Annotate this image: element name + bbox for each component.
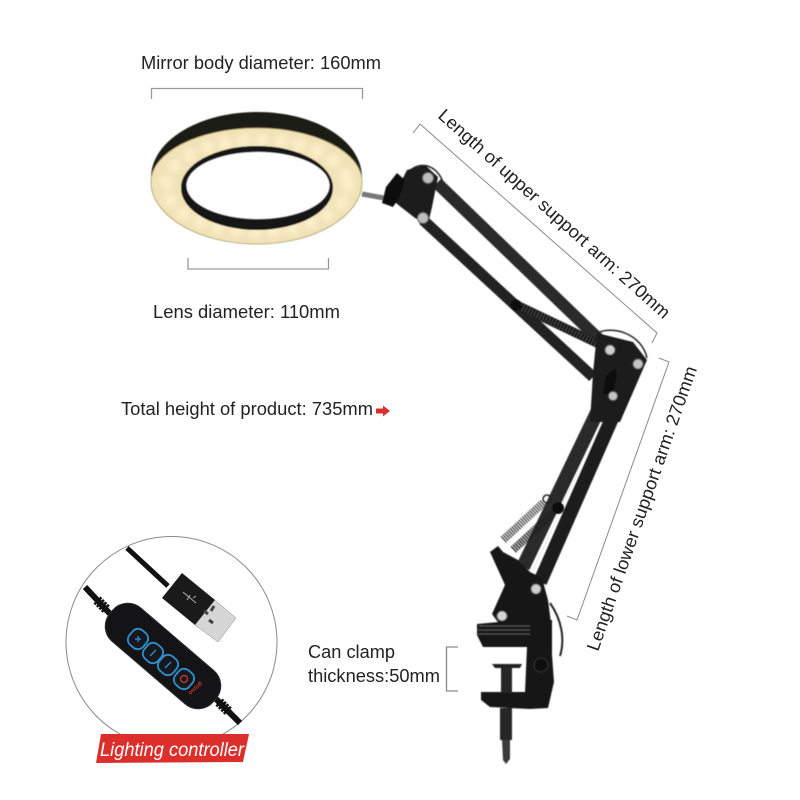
label: clamp thickness: Can clamp xyxy=(308,642,395,662)
lens xyxy=(186,152,330,219)
label: total height: Total height of product: 735mm xyxy=(121,399,373,419)
usb symbol xyxy=(183,592,196,603)
head bolts xyxy=(422,172,434,184)
label: lens diameter: Lens diameter: 110mm xyxy=(153,302,340,322)
power wire xyxy=(550,603,562,656)
lower arm bars xyxy=(540,400,620,582)
upper spring xyxy=(517,305,607,348)
clamp screw xyxy=(500,668,512,740)
controller body xyxy=(97,595,229,717)
spring pivot xyxy=(510,300,522,310)
magnifier ring lamp xyxy=(151,112,362,244)
on/off mark: on/off xyxy=(187,681,205,697)
head wire xyxy=(407,165,443,182)
label: clamp thickness xyxy=(308,642,440,686)
label: upper arm length: Length of upper support arm: 270mm xyxy=(434,105,674,323)
head plate xyxy=(392,165,438,224)
elbow plate xyxy=(590,333,647,422)
swivel joint xyxy=(362,194,384,198)
base plate xyxy=(490,546,551,625)
bracket: clamp thickness xyxy=(446,647,458,691)
dimension line: upper arm xyxy=(413,124,657,343)
clamp body xyxy=(477,620,554,709)
inner lens rim xyxy=(181,146,333,230)
banner background xyxy=(96,734,249,763)
head knob xyxy=(382,173,405,207)
heading: mirror body diameter: Mirror body diameter: 160mm xyxy=(141,53,381,73)
clamp knob xyxy=(534,658,548,672)
power glyph xyxy=(180,676,188,682)
base bolts xyxy=(531,584,541,594)
ring body xyxy=(151,112,362,186)
label: lower arm length: Length of lower support arm: 270mm xyxy=(583,364,701,653)
usb contacts xyxy=(204,606,214,623)
arrow: total height xyxy=(376,406,390,416)
bracket: mirror body diameter xyxy=(152,88,362,99)
inset circle xyxy=(66,536,277,748)
slit between lower bars xyxy=(533,473,578,570)
usb metal tip xyxy=(195,600,236,642)
dimension line: lower arm xyxy=(567,358,669,620)
ring light face xyxy=(151,128,362,244)
upper arm bars xyxy=(437,183,607,347)
usb plug housing xyxy=(162,573,215,625)
articulated arm xyxy=(362,165,647,625)
desk clamp xyxy=(477,603,562,764)
panel: lighting controller xyxy=(66,536,277,763)
control buttons xyxy=(125,626,197,692)
controller cables xyxy=(85,548,240,723)
elbow wire xyxy=(597,330,647,358)
label: clamp thickness: thickness:50mm xyxy=(308,666,440,686)
bracket: lens diameter xyxy=(188,258,328,269)
screw tip xyxy=(502,740,510,764)
clamp grip ridges xyxy=(478,626,530,634)
clamp screw pad xyxy=(492,664,522,668)
banner text: Lighting controller xyxy=(100,739,245,761)
lower springs xyxy=(503,503,543,540)
elbow knob xyxy=(603,368,617,395)
elbow bolts xyxy=(605,345,615,355)
button glyphs xyxy=(135,636,171,668)
